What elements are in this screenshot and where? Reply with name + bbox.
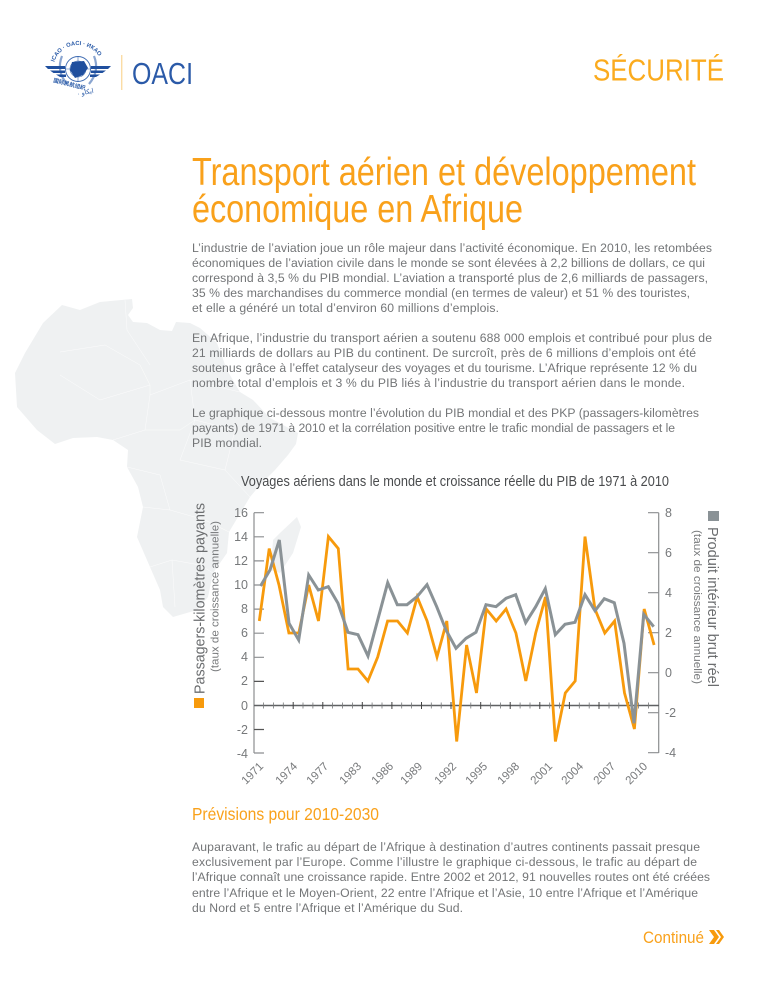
icon: double chevron: [709, 930, 724, 944]
logo: OACI emblem: · ايكاو: [77, 87, 95, 98]
year labels: 2010: [624, 761, 650, 787]
year labels: 1974: [274, 760, 301, 787]
right axis: 6: [665, 546, 672, 560]
right axis: -2: [665, 706, 676, 720]
right axis: 4: [665, 586, 672, 600]
logo: OACI emblem: ICAO · OACI · ИКАО: [50, 40, 102, 62]
intro paragraph: et elle a généré un total d’environ 60 millions d’emplois.: [192, 301, 499, 315]
year labels: [240, 760, 650, 787]
passenger-kilometres line (orange): [259, 537, 654, 742]
left legend: (taux de croissance annuelle): [210, 521, 222, 672]
intro paragraph: [192, 241, 712, 315]
background map: Africa: [15, 299, 301, 617]
year labels: 1971: [240, 761, 266, 787]
Africa paragraph: 21 milliards de dollars au PIB du continent. De surcroît, près de 6 millions d’emplois ont été: [192, 346, 696, 360]
left axis: 12: [234, 554, 248, 568]
intro paragraph: économiques de l’aviation civile dans le monde se sont élevées à 2,2 billions de dollars, ce qui: [192, 256, 705, 270]
intro paragraph: correspond à 3,5 % du PIB mondial. L’aviation a transporté plus de 2,6 milliards de passagers,: [192, 271, 708, 285]
right axis: -4: [665, 746, 676, 760]
chart intro paragraph: PIB mondial.: [192, 436, 262, 450]
right axis: [648, 506, 676, 760]
left axis: 16: [234, 506, 248, 520]
Africa paragraph: soutenus grâce à l’effet catalyseur des voyages et du tourisme. L’Afrique représente 12 % du: [192, 361, 697, 375]
left axis: 14: [234, 530, 248, 544]
logo: OACI emblem: 国际民航组织: [53, 76, 87, 92]
globe: [60, 56, 96, 84]
logo divider: [121, 55, 122, 90]
chart intro paragraph: payants) de 1971 à 2010 et la corrélation positive entre le trafic mondial de passagers et le: [192, 421, 675, 435]
right legend: [691, 511, 720, 687]
left legend: [192, 503, 222, 708]
continued link: Continué: [643, 928, 704, 947]
forecast paragraph: l’Afrique connaît une croissance rapide. Entre 2002 et 2012, 91 nouvelles routes ont été créées: [192, 870, 710, 884]
Africa paragraph: En Afrique, l’industrie du transport aérien a soutenu 688 000 emplois et contribué pour plus de: [192, 331, 712, 345]
intro paragraph: L’industrie de l’aviation joue un rôle majeur dans l’activité économique. En 2010, les retombées: [192, 241, 712, 255]
GDP line (grey): [260, 540, 654, 723]
right axis: 2: [665, 626, 672, 640]
right legend: Produit intérieur brut réel: [704, 527, 720, 687]
left axis: 6: [241, 626, 248, 640]
section label: SÉCURITÉ: SÉCURITÉ: [593, 52, 724, 88]
forecast paragraph: du Nord et 5 entre l’Afrique et l’Amérique du Sud.: [192, 901, 463, 915]
year labels: 1983: [338, 761, 364, 787]
Africa paragraph: [192, 331, 712, 390]
year labels: 1992: [433, 761, 459, 787]
zero line with year ticks: [254, 702, 659, 709]
chart intro paragraph: Le graphique ci-dessous montre l’évolution du PIB mondial et des PKP (passagers-kilomètres: [192, 406, 699, 420]
left axis: 10: [234, 578, 248, 592]
right axis: 8: [665, 506, 672, 520]
left axis: -4: [237, 747, 248, 761]
right legend: (taux de croissance annuelle): [691, 530, 703, 684]
left axis: 4: [241, 650, 248, 664]
year labels: 1986: [370, 761, 396, 787]
chart intro paragraph: [192, 406, 699, 450]
right axis: 0: [665, 666, 672, 680]
left legend: Passagers-kilomètres payants: [192, 503, 208, 694]
forecast paragraph: [192, 840, 710, 915]
subheading: forecasts: Prévisions pour 2010-2030: [192, 804, 379, 824]
year labels: 1989: [399, 761, 425, 787]
forecast paragraph: exclusivement par l’Europe. Comme l’illustre le graphique ci-dessous, le trafic au départ de: [192, 855, 697, 869]
Africa paragraph: nombre total d’emplois et 3 % du PIB liés à l’industrie du transport aérien dans le monde.: [192, 376, 685, 390]
left axis: 8: [241, 602, 248, 616]
chart title: Voyages aériens dans le monde et croissance réelle du PIB de 1971 à 2010: [241, 474, 669, 490]
emblem ring text: [54, 45, 102, 63]
year labels: 1995: [464, 761, 490, 787]
left axis: -2: [237, 723, 248, 737]
left axis: 0: [241, 699, 248, 713]
year labels: 2007: [592, 761, 618, 787]
logo: OACI emblem: [45, 40, 111, 98]
year labels: 2001: [529, 761, 555, 787]
year labels: 1998: [496, 761, 522, 787]
forecast paragraph: Auparavant, le trafic au départ de l’Afrique à destination d’autres continents passait presque: [192, 840, 700, 854]
left axis: 2: [241, 674, 248, 688]
wings: [45, 66, 111, 77]
forecast paragraph: entre l’Afrique et le Moyen-Orient, 22 entre l’Afrique et l’Asie, 10 entre l’Afrique et l’Amérique: [192, 886, 698, 900]
intro paragraph: 35 % des marchandises du commerce mondial (en termes de valeur) et 51 % des touristes,: [192, 286, 690, 300]
chart: air travel and GDP growth: [192, 503, 720, 787]
title: économique en Afrique: [192, 188, 523, 231]
year labels: 1977: [305, 761, 331, 787]
title: [192, 151, 696, 231]
logo: OACI wordmark: OACI: [132, 56, 193, 91]
left axis: [234, 506, 264, 761]
year labels: 2004: [560, 760, 587, 787]
